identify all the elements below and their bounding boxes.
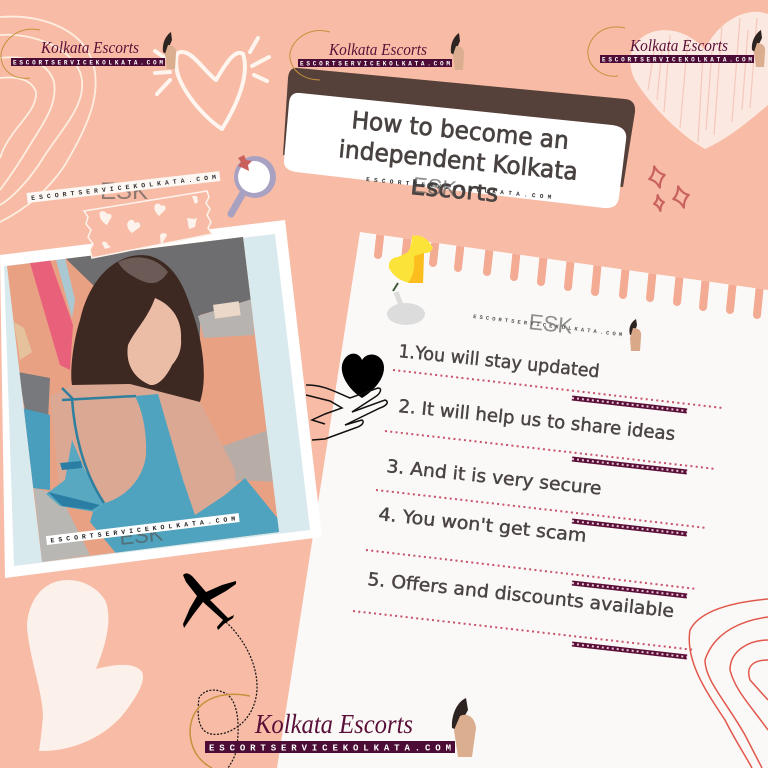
- list item 5: 5. Offers and discounts available: [366, 569, 675, 622]
- title watermark: ESCORTSERVICEKOLKATA.COM: [366, 176, 552, 201]
- logo top left: [1, 29, 176, 78]
- notebook paper with torn top: [277, 228, 768, 768]
- washi tape with hearts: [84, 191, 212, 258]
- photo frame: [0, 220, 322, 578]
- watermark ESK: ESK: [100, 178, 148, 205]
- white heart doodle with rays: [155, 38, 269, 129]
- watermark url bar: ESCORTSERVICEKOLKATA.COM: [31, 174, 216, 202]
- white swirl lines top left: [0, 17, 96, 222]
- figure: [163, 32, 172, 54]
- list item 5: [353, 569, 695, 657]
- list item 4: 4. You won't get scam: [377, 504, 588, 547]
- dress: [90, 394, 279, 558]
- title line 3 partly hidden: Escorts: [409, 172, 500, 208]
- url: ESCORTSERVICEKOLKATA.COM: [473, 313, 623, 338]
- title line 2: independent Kolkata: [337, 135, 579, 186]
- url bar: [11, 58, 165, 66]
- logo bottom center: [190, 694, 476, 768]
- dashed flight path: [198, 622, 257, 768]
- hand mirror: [231, 155, 276, 214]
- url bar: [205, 741, 455, 753]
- figure: [629, 319, 641, 351]
- list item 3: [376, 456, 707, 534]
- watermark bar top left: [27, 171, 220, 205]
- cream heart bottom left: [27, 580, 143, 751]
- list item 1: 1.You will stay updated: [397, 341, 601, 382]
- card front: [284, 93, 626, 208]
- icon: airplane: [183, 573, 236, 630]
- figure: [752, 30, 762, 52]
- gold arc: [1, 29, 40, 78]
- script name: Kolkata Escorts: [629, 36, 728, 55]
- url bar: [600, 55, 754, 63]
- photo watermark ESK: ESK: [118, 520, 165, 550]
- title ESK watermark: ESK: [411, 172, 458, 202]
- gold arc: [588, 27, 625, 76]
- logo top left: ESCORTSERVICEKOLKATA.COM: [13, 60, 163, 66]
- list item 2: 2. It will help us to share ideas: [397, 396, 676, 445]
- list item 3: 3. And it is very secure: [385, 456, 602, 500]
- list item 2: [385, 396, 716, 472]
- list item 4: [366, 504, 697, 596]
- title card: [283, 68, 635, 208]
- sparkle stars: [646, 164, 692, 212]
- logo top right: ESCORTSERVICEKOLKATA.COM: [602, 56, 752, 64]
- figure: [452, 698, 468, 730]
- logo top center: ESCORTSERVICEKOLKATA.COM: [300, 60, 450, 68]
- photo of woman in blue dress, simplified: [7, 237, 279, 562]
- card back: [283, 68, 635, 187]
- red swirl lines bottom right: [689, 599, 768, 768]
- logo top center: [290, 31, 464, 80]
- title line 1: How to become an: [350, 106, 570, 155]
- gold arc: [190, 694, 250, 768]
- url bar: [298, 59, 452, 67]
- script name: Kolkata Escorts: [328, 40, 427, 59]
- logo bottom center: ESCORTSERVICEKOLKATA.COM: [209, 744, 451, 754]
- logo top right: [588, 27, 765, 76]
- skin back and arm: [50, 384, 236, 520]
- sketch heart top right: [630, 12, 768, 149]
- gold arc: [290, 31, 330, 80]
- push pin: [387, 236, 433, 325]
- icon: hand holding black heart: [306, 354, 387, 440]
- script name: Kolkata Escorts: [254, 709, 413, 739]
- figure: [451, 33, 460, 55]
- photo watermark bar: ESCORTSERVICEKOLKATA.COM: [50, 516, 236, 545]
- paper watermark: [473, 309, 641, 351]
- script name: Kolkata Escorts: [40, 38, 139, 57]
- ESK mark: ESK: [527, 309, 574, 339]
- list item 1: [393, 341, 723, 411]
